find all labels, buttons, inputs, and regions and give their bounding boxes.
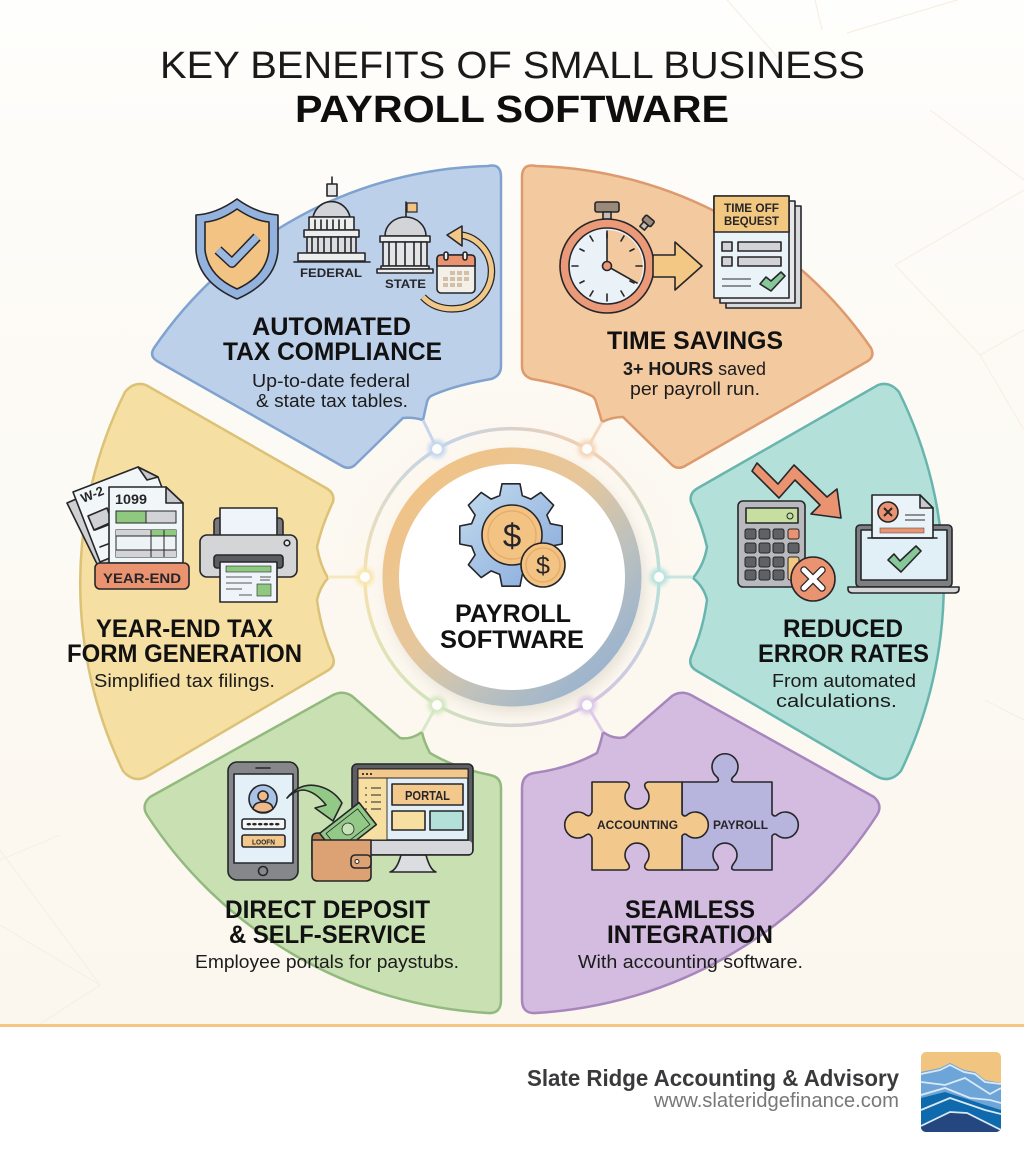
icon: tax forms: YEAR-END bbox=[103, 570, 181, 586]
icon: federal capitol: FEDERAL bbox=[300, 266, 362, 280]
title: KEY BENEFITS OF SMALL BUSINESS bbox=[160, 45, 865, 87]
icon: stopwatch bbox=[560, 202, 655, 313]
icon: gear with coins bbox=[460, 484, 565, 587]
gradient ring bbox=[391, 456, 633, 698]
icon: tax forms bbox=[67, 467, 189, 589]
heading: year-end tax form generation: YEAR-END TAX bbox=[96, 615, 273, 643]
icon: arrow bbox=[653, 242, 702, 290]
hub label: PAYROLL bbox=[455, 600, 571, 628]
hub label bbox=[440, 600, 584, 654]
icon: laptop with error document bbox=[848, 495, 959, 593]
footer bbox=[0, 1024, 1024, 1154]
company name: Slate Ridge Accounting & Advisory bbox=[527, 1065, 899, 1091]
logo bbox=[921, 1052, 1001, 1132]
text: simplified filings: Simplified tax filings. bbox=[94, 671, 275, 691]
text: automated calculations: calculations. bbox=[776, 691, 897, 711]
icon: calendar with renewal arrow bbox=[423, 226, 491, 309]
text: employee portals: Employee portals for paystubs. bbox=[195, 952, 459, 972]
panel: seamless integration bbox=[522, 693, 879, 1013]
heading: direct deposit and self-service: & SELF-SERVICE bbox=[229, 921, 426, 949]
panel: reduced error rates bbox=[690, 384, 959, 779]
heading: direct deposit and self-service bbox=[225, 896, 430, 949]
heading: seamless integration bbox=[607, 896, 773, 949]
connector lines bbox=[328, 420, 693, 732]
text: accounting software: With accounting software. bbox=[578, 952, 803, 972]
panel: time savings bbox=[522, 165, 872, 468]
website: www.slateridgefinance.com bbox=[653, 1090, 899, 1112]
icon: transfer arrow bbox=[287, 785, 342, 821]
text: hours saved: per payroll run. bbox=[630, 379, 760, 399]
outer ring bbox=[365, 429, 659, 725]
title: PAYROLL SOFTWARE bbox=[295, 89, 729, 131]
icon: portal monitor: PORTAL bbox=[405, 789, 450, 803]
text: tax tables bbox=[252, 371, 410, 411]
heading: year-end tax form generation bbox=[67, 615, 302, 668]
panel: year-end tax form generation bbox=[67, 384, 334, 779]
icon: tax forms: 1099 bbox=[115, 492, 147, 507]
text: hours saved: 3+ HOURS saved bbox=[623, 359, 766, 379]
icon: phone login bbox=[228, 762, 298, 880]
icon: phone login: LOOFN bbox=[252, 838, 275, 846]
heading: time savings: TIME SAVINGS bbox=[607, 327, 783, 355]
heading: automated tax compliance: AUTOMATED bbox=[252, 313, 411, 341]
heading: automated tax compliance: TAX COMPLIANCE bbox=[223, 338, 442, 366]
white hub bbox=[399, 464, 625, 690]
ring nodes bbox=[356, 440, 668, 714]
text: tax tables: & state tax tables. bbox=[256, 391, 408, 411]
hub label: SOFTWARE bbox=[440, 626, 584, 654]
title bbox=[160, 45, 865, 131]
text: tax tables: Up-to-date federal bbox=[252, 371, 410, 391]
text: automated calculations: From automated bbox=[772, 671, 916, 691]
panel: automated tax compliance bbox=[152, 165, 501, 468]
icon: printer bbox=[200, 508, 297, 602]
icon: puzzle pieces: PAYROLL bbox=[713, 820, 768, 832]
icon: phone login: •••••• bbox=[246, 819, 280, 829]
icon: falling error arrow bbox=[752, 463, 841, 518]
icon: state capitol bbox=[377, 202, 433, 291]
icon: time off request document: BEQUEST bbox=[724, 216, 779, 228]
icon: gear with coins: $ bbox=[503, 517, 521, 554]
heading: reduced error rates bbox=[758, 615, 929, 668]
icon: wallet with cash bbox=[312, 803, 376, 881]
icon: shield with check bbox=[196, 199, 278, 299]
heading: seamless integration: SEAMLESS bbox=[625, 896, 755, 924]
icon: puzzle pieces bbox=[565, 754, 798, 870]
heading: reduced error rates: ERROR RATES bbox=[758, 640, 929, 668]
icon: portal monitor bbox=[352, 764, 473, 872]
icon: time off request document bbox=[714, 196, 801, 308]
text: hours saved bbox=[623, 359, 766, 399]
text: automated calculations bbox=[772, 671, 916, 711]
icon: gear with coins: $ bbox=[536, 552, 550, 580]
heading: year-end tax form generation: FORM GENERATION bbox=[67, 640, 302, 668]
panel: direct deposit and self-service bbox=[145, 693, 501, 1013]
heading: direct deposit and self-service: DIRECT DEPOSIT bbox=[225, 896, 430, 924]
central hub bbox=[328, 420, 693, 732]
icon: time off request document: TIME OFF bbox=[724, 203, 779, 215]
icon: puzzle pieces: ACCOUNTING bbox=[597, 820, 678, 832]
icon: calculator bbox=[738, 501, 835, 601]
icon: federal capitol bbox=[294, 177, 370, 280]
heading: automated tax compliance bbox=[223, 313, 442, 366]
heading: seamless integration: INTEGRATION bbox=[607, 921, 773, 949]
icon: state capitol: STATE bbox=[385, 277, 426, 291]
heading: reduced error rates: REDUCED bbox=[783, 615, 903, 643]
icon: tax forms: W-2 bbox=[79, 483, 106, 506]
